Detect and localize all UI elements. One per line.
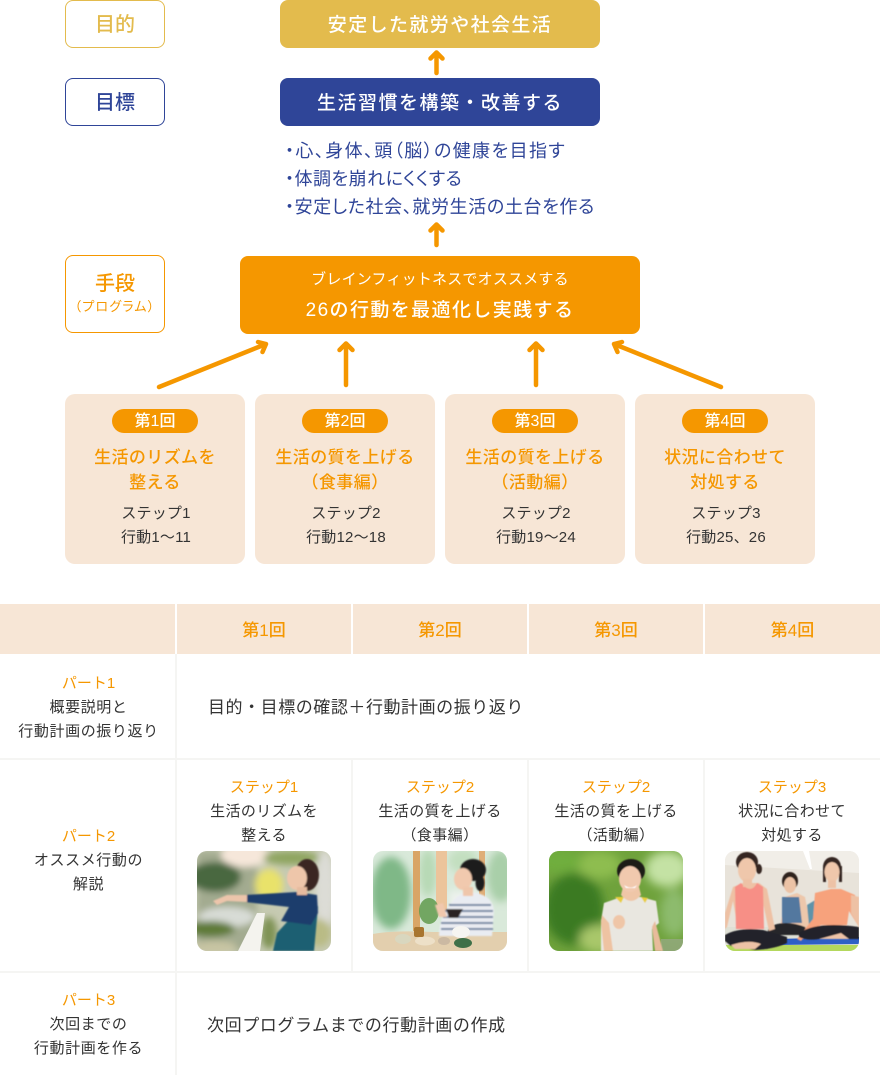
goal detail list: ・心、身体、頭（脳）の健康を目指す: [285, 141, 566, 161]
card: 第2回: ステップ2: [311, 505, 381, 522]
card: 第1回: 整える: [129, 473, 181, 492]
card: 第3回: 第3回: [515, 413, 555, 430]
goal detail list: ・安定した社会、就労生活の土台を作る: [285, 197, 595, 217]
goal detail list: [285, 141, 595, 217]
column: ステップ3: 状況に合わせて: [738, 803, 846, 820]
photo: woman eating breakfast: [373, 851, 507, 951]
box: 安定した就労や社会生活: [280, 0, 600, 48]
card: 第3回: [445, 394, 625, 564]
card: 第4回: 第4回: [705, 413, 745, 430]
card: 第3回: ステップ2: [501, 505, 571, 522]
card: 第2回: 行動12～18: [306, 529, 386, 546]
column: ステップ2 活動編: （活動編）: [577, 827, 654, 844]
photo: women meditating in a studio: [725, 851, 859, 951]
column: ステップ2 食事編: ステップ2: [406, 779, 474, 796]
card: 第2回: （食事編）: [302, 473, 388, 492]
table header row: 第3回: [594, 621, 638, 640]
row label: パート2: 解説: [73, 876, 104, 893]
card: 第1回: ステップ1: [121, 505, 191, 522]
row label: パート1: 行動計画の振り返り: [18, 723, 159, 740]
photo: woman stretching on a balcony: [197, 851, 331, 951]
row label: パート1: [18, 675, 159, 740]
box: 生活習慣を構築・改善する: [280, 78, 600, 126]
column: ステップ2 食事編: （食事編）: [401, 827, 478, 844]
arrow: means to goal: [428, 222, 445, 248]
photo: woman jogging in the park: [549, 851, 683, 951]
label: 目的: 目的: [95, 14, 135, 36]
column: ステップ2 食事編: [378, 779, 502, 844]
box: 手段: ブレインフィットネスでオススメする: [311, 271, 569, 288]
row label: パート1: パート1: [62, 675, 115, 692]
row label: パート3: 次回までの: [49, 1016, 128, 1033]
box: 安定した就労や社会生活: 安定した就労や社会生活: [328, 15, 552, 36]
column: ステップ2 食事編: 生活の質を上げる: [378, 803, 502, 820]
label: 手段（プログラム）: （プログラム）: [75, 299, 155, 314]
card: 第3回: 行動19～24: [496, 529, 576, 546]
table header row: 第1回: [242, 621, 286, 640]
arrow: goal to purpose: [428, 50, 445, 76]
box: 手段: 26の行動を最適化し実践する: [306, 300, 574, 321]
column: ステップ3: [738, 779, 846, 844]
card: 第4回: 状況に合わせて: [664, 448, 786, 467]
card: 第3回: （活動編）: [492, 473, 578, 492]
table header row: 第4回: [771, 621, 814, 640]
goal detail list: ・体調を崩れにくくする: [285, 169, 462, 189]
card: 第2回: [255, 394, 435, 564]
card: 第4回: 対処する: [690, 473, 760, 492]
row text: part 3: 次回プログラムまでの行動計画の作成: [207, 1016, 506, 1035]
column: ステップ1: 生活のリズムを: [210, 803, 318, 820]
row label: パート2: パート2: [62, 828, 115, 845]
card: 第1回: 行動1～11: [121, 529, 191, 546]
label: 目標: 目標: [95, 92, 135, 114]
arrows: sessions to means: [156, 340, 724, 390]
column: ステップ2 活動編: ステップ2: [582, 779, 650, 796]
card: 第1回: 生活のリズムを: [94, 448, 216, 467]
card: 第4回: 行動25、26: [686, 529, 766, 546]
box: 手段: [240, 256, 640, 334]
column: ステップ2 活動編: [554, 779, 678, 844]
table grid lines: [0, 654, 880, 1075]
card: 第3回: 生活の質を上げる: [465, 448, 605, 467]
column: ステップ3: 対処する: [761, 827, 823, 844]
card: 第4回: [635, 394, 815, 564]
card: 第4回: ステップ3: [691, 505, 761, 522]
table header row: [0, 604, 880, 654]
column: ステップ2 活動編: 生活の質を上げる: [554, 803, 678, 820]
row label: パート3: [34, 992, 143, 1057]
box: 生活習慣を構築・改善する: 生活習慣を構築・改善する: [317, 93, 563, 114]
column: ステップ1: ステップ1: [230, 779, 298, 796]
column: ステップ1: 整える: [241, 827, 287, 844]
label: 手段（プログラム）: [65, 255, 165, 333]
row label: パート1: 概要説明と: [49, 699, 128, 716]
row label: パート2: [34, 828, 143, 893]
label: 目標: [65, 78, 165, 126]
card: 第1回: [65, 394, 245, 564]
card: 第2回: 生活の質を上げる: [275, 448, 415, 467]
row label: パート3: パート3: [62, 992, 115, 1009]
label: 目的: [65, 0, 165, 48]
row label: パート3: 行動計画を作る: [34, 1040, 143, 1057]
table header row: 第2回: [418, 621, 462, 640]
column: ステップ1: [210, 779, 318, 844]
label: 手段（プログラム）: 手段: [95, 273, 135, 295]
card: 第2回: 第2回: [325, 413, 365, 430]
column: ステップ3: ステップ3: [758, 779, 826, 796]
row label: パート2: オススメ行動の: [34, 852, 143, 869]
card: 第1回: 第1回: [135, 413, 175, 430]
row text: part 1: 目的・目標の確認＋行動計画の振り返り: [208, 698, 524, 717]
